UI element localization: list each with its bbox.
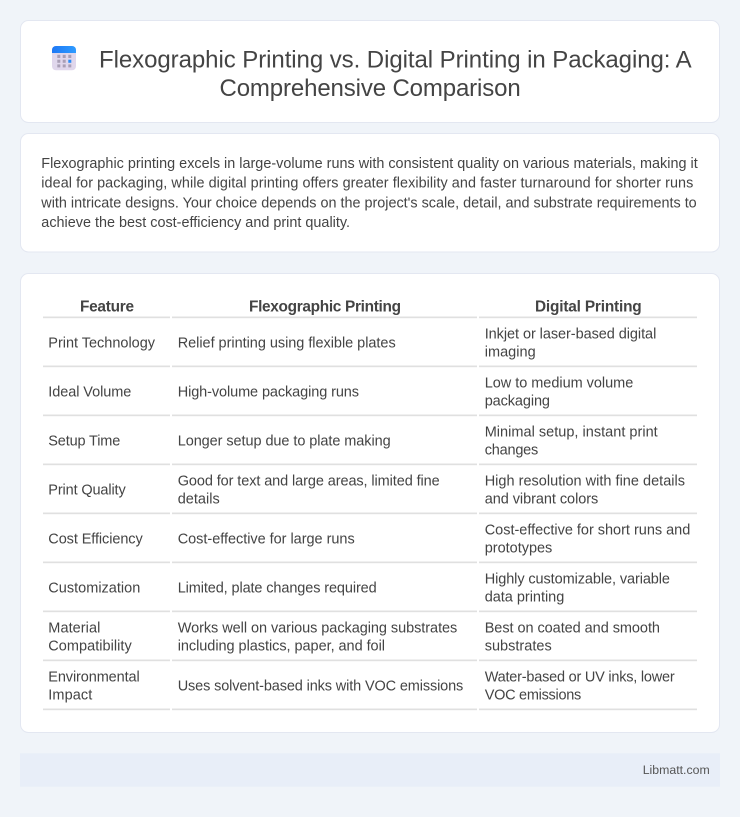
- intro paragraph: with intricate designs. Your choice depends on the project's scale, detail, and substrate requirements to: [40, 195, 697, 211]
- table header row: Flexographic Printing: [249, 299, 401, 316]
- row: environmental impact: Uses solvent-based inks with VOC emissions: [178, 679, 463, 695]
- row: cost efficiency: prototypes: [485, 541, 552, 557]
- row: print technology: Relief printing using flexible plates: [178, 336, 396, 352]
- row: customization: Highly customizable, variable: [485, 572, 670, 588]
- row: setup time: changes: [485, 443, 538, 459]
- panel: header: [20, 20, 720, 122]
- row: print quality: Good for text and large areas, limited fine: [178, 474, 440, 490]
- row: cost efficiency: Cost Efficiency: [48, 532, 143, 548]
- row: print quality: Print Quality: [48, 483, 126, 499]
- table header row: Feature: [80, 299, 134, 316]
- panel: comparison table: [20, 274, 720, 732]
- row: print quality: High resolution with fine details: [485, 474, 685, 490]
- row: material compatibility: Best on coated and smooth: [485, 620, 660, 636]
- icon: calendar: [52, 46, 76, 70]
- title: [99, 46, 692, 102]
- row: ideal volume: High-volume packaging runs: [178, 385, 359, 401]
- row: customization: Customization: [48, 581, 140, 597]
- row: cost efficiency: Cost-effective for large runs: [178, 532, 355, 548]
- row: environmental impact: Environmental: [48, 670, 140, 686]
- row: print quality: details: [178, 492, 220, 508]
- footer: [20, 753, 720, 787]
- row: material compatibility: substrates: [485, 639, 552, 655]
- row: cost efficiency: [43, 522, 697, 563]
- row: material compatibility: [43, 620, 697, 661]
- row: environmental impact: Impact: [48, 688, 92, 704]
- intro paragraph: achieve the best cost-efficiency and print quality.: [41, 215, 350, 231]
- row: setup time: [43, 424, 697, 465]
- intro paragraph: [40, 156, 698, 231]
- row: cost efficiency: Cost-effective for short runs and: [485, 522, 690, 538]
- row: customization: data printing: [485, 590, 564, 606]
- row: customization: [43, 572, 697, 612]
- table header row: Digital Printing: [535, 299, 642, 316]
- row: ideal volume: packaging: [485, 394, 550, 410]
- row: ideal volume: Ideal Volume: [48, 385, 131, 401]
- row: print technology: Print Technology: [48, 336, 156, 352]
- row: print technology: Inkjet or laser-based digital: [485, 326, 656, 342]
- row: environmental impact: Water-based or UV inks, lower: [485, 670, 675, 686]
- intro paragraph: Flexographic printing excels in large-volume runs with consistent quality on various materials, making it: [41, 156, 698, 172]
- title: Flexographic Printing vs. Digital Printing in Packaging: A: [99, 46, 692, 74]
- row: material compatibility: including plastics, paper, and foil: [178, 639, 385, 655]
- panel: introduction: [20, 134, 720, 252]
- row: setup time: Minimal setup, instant print: [485, 424, 658, 440]
- row: environmental impact: [43, 670, 697, 710]
- row: material compatibility: Compatibility: [48, 639, 132, 655]
- row: environmental impact: VOC emissions: [485, 688, 581, 704]
- row: print quality: and vibrant colors: [485, 492, 598, 508]
- row: material compatibility: Works well on various packaging substrates: [178, 620, 457, 636]
- table header row: [43, 299, 697, 318]
- row: print quality: [43, 474, 697, 514]
- title: Comprehensive Comparison: [220, 75, 521, 102]
- row: print technology: [43, 326, 697, 367]
- row: material compatibility: Material: [48, 620, 100, 636]
- row: ideal volume: [43, 376, 697, 416]
- row: ideal volume: Low to medium volume: [485, 376, 633, 392]
- intro paragraph: ideal for packaging, while digital printing offers greater flexibility and faster turnaround for shorter runs: [41, 176, 693, 192]
- row: setup time: Longer setup due to plate making: [178, 434, 391, 450]
- row: setup time: Setup Time: [48, 434, 120, 450]
- row: print technology: imaging: [485, 345, 536, 361]
- row: customization: Limited, plate changes required: [178, 581, 377, 597]
- footer credit: Libmatt.com: [643, 763, 710, 777]
